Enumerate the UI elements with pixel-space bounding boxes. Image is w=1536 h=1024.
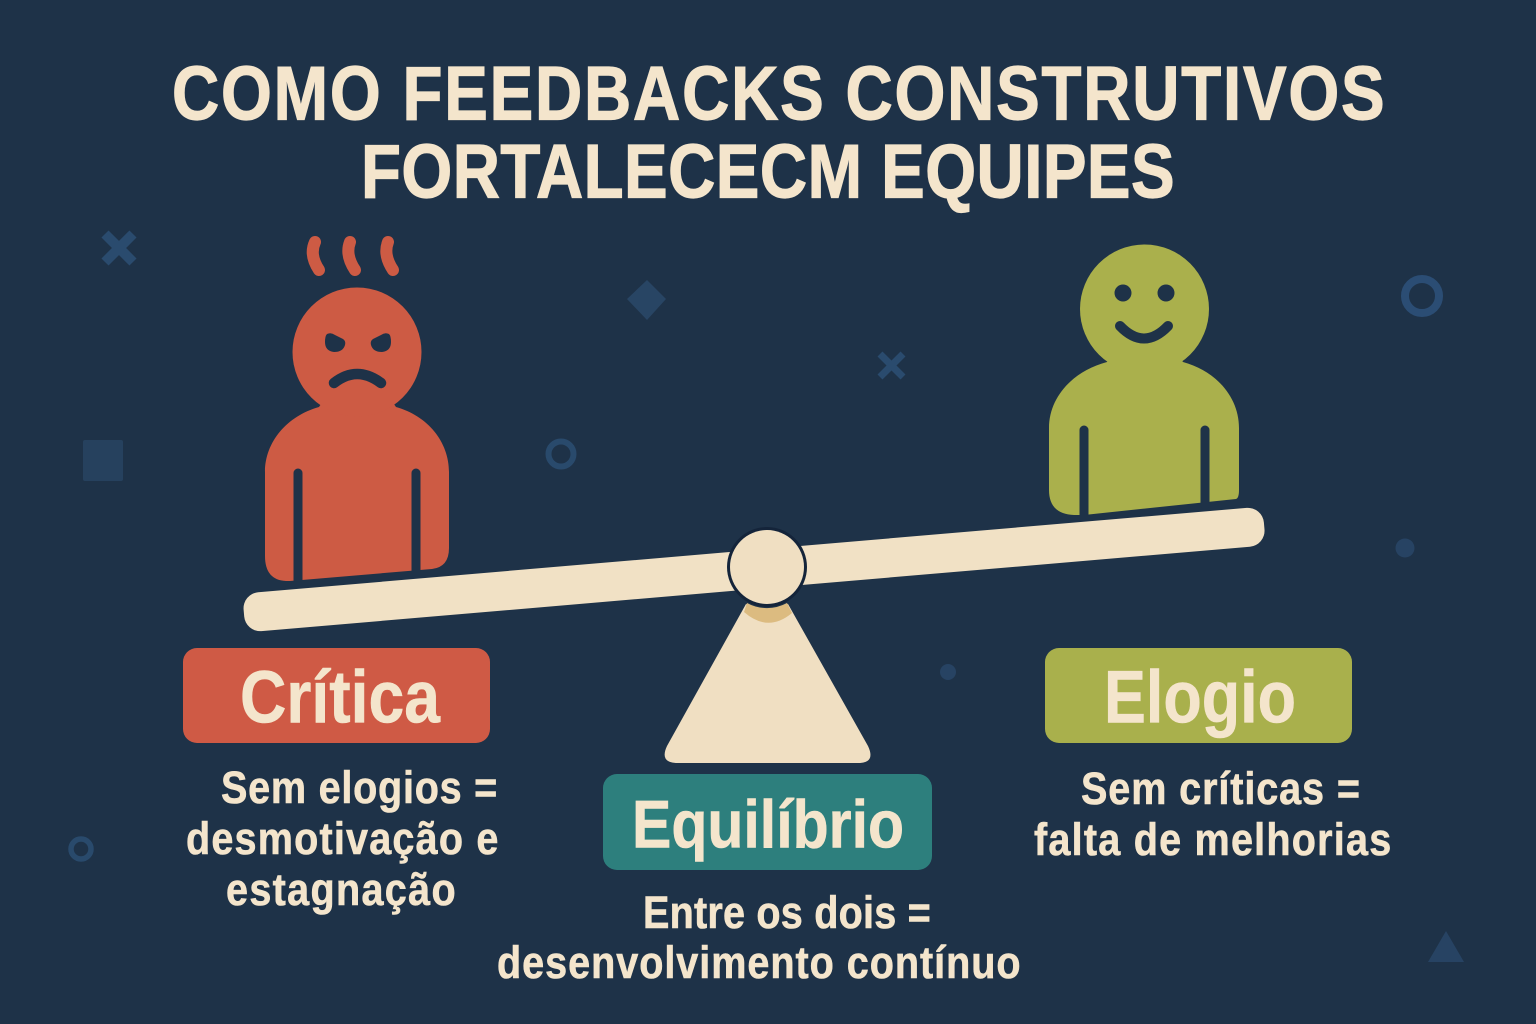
critic person [265,242,449,590]
balance scale [242,507,1266,763]
text: crítica description: desmotivação e [186,814,498,864]
text: equilíbrio description: desenvolvimento contínuo [497,938,1021,988]
text: elogio description [1034,764,1391,865]
text: elogio description: Sem críticas = [1081,764,1360,814]
text: crítica description [186,763,498,915]
arm gaps [1084,430,1205,520]
arm gaps [298,473,416,590]
smiling eyes [1114,284,1174,302]
text: equilíbrio description [497,888,1021,988]
happy person [1049,244,1239,520]
title [172,52,1385,215]
title: COMO FEEDBACKS CONSTRUTIVOS [172,52,1385,137]
title: FORTALECECM EQUIPES [361,130,1175,215]
panel: elogio: Elogio [1104,656,1296,738]
pivot circle [730,530,804,604]
green body [1049,309,1239,515]
panel: equilíbrio [603,774,932,870]
steam lines [313,242,393,270]
gold pivot band [744,603,792,623]
angry eyes [325,333,391,352]
text: crítica description: estagnação [226,865,456,915]
green head circle [1080,244,1209,374]
text: crítica description: Sem elogios = [221,763,497,813]
text: equilíbrio description: Entre os dois = [643,888,931,938]
red head circle [292,288,422,416]
plank [242,507,1266,632]
fulcrum triangle [665,604,870,763]
background decorative shapes [71,234,1464,962]
smile [1120,326,1168,338]
frown [334,374,381,383]
panel: crítica [183,648,490,743]
panel: elogio [1045,648,1352,743]
panel: crítica: Crítica [240,656,441,738]
red body and head [265,352,449,581]
text: elogio description: falta de melhorias [1034,815,1391,865]
pivot ring [727,527,807,607]
panel: equilíbrio: Equilíbrio [632,786,904,862]
